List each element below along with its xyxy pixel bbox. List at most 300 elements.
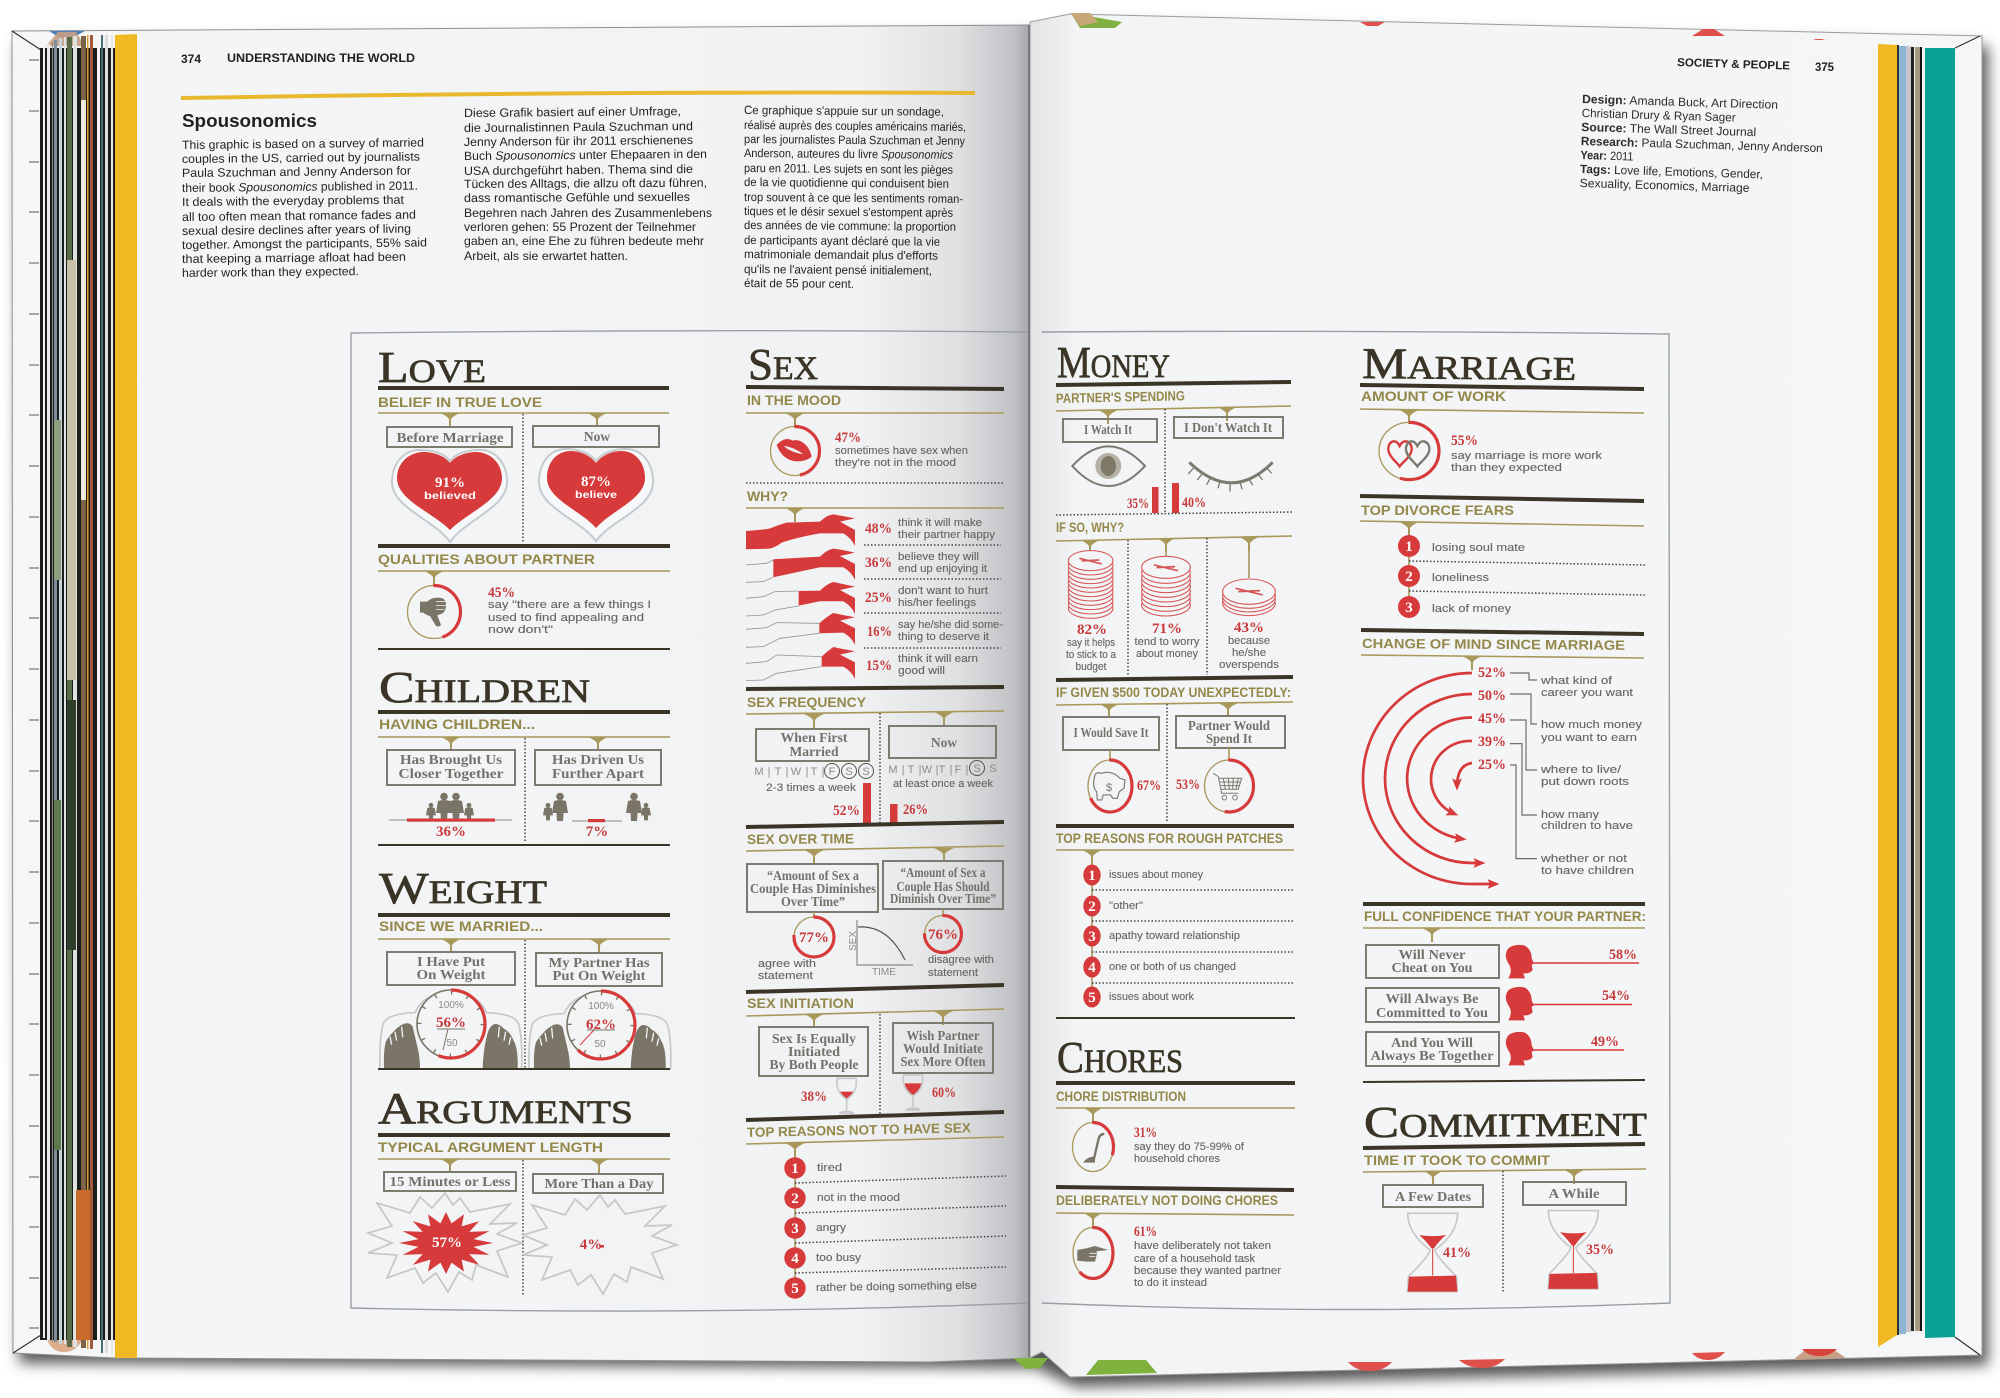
stat: 52%: 52% bbox=[833, 803, 860, 819]
subheading: sex frequency: SEX FREQUENCY bbox=[747, 695, 866, 710]
label: now: Now bbox=[931, 735, 957, 750]
German text: Jenny Anderson für ihr 2011 erschienenes bbox=[464, 133, 693, 149]
week row: first married: S bbox=[845, 766, 853, 778]
icon: piggy bank ring 67%: $ bbox=[1106, 782, 1112, 794]
English text: This graphic is based on a survey of married bbox=[182, 135, 424, 152]
icon: scale 56%: 100% bbox=[438, 1000, 464, 1011]
French text: Anderson, auteures du livre Spousonomics bbox=[744, 146, 953, 162]
icon: scale 56%: 56% bbox=[436, 1015, 466, 1031]
ranked list: rough patches: "other" bbox=[1109, 900, 1143, 912]
English text bbox=[182, 135, 427, 280]
label: will never cheat: Will Never bbox=[1398, 947, 1466, 962]
leader lines and labels: you want to earn bbox=[1541, 732, 1637, 744]
heart: 87% believe: 87% bbox=[581, 474, 611, 490]
stat: 55%: 55% bbox=[1451, 433, 1478, 449]
stat: 61%: care of a household task bbox=[1134, 1253, 1256, 1265]
icon: hourglass 41% bbox=[1408, 1213, 1471, 1292]
label: equally initiated: By Both People bbox=[770, 1057, 858, 1072]
French text: matrimoniale demandait plus d'efforts bbox=[744, 247, 938, 263]
stat list: why: believe they will bbox=[898, 551, 979, 563]
icon: scale 56% bbox=[380, 990, 522, 1068]
week row: now: S bbox=[989, 763, 997, 775]
label: equally initiated: Sex Is Equally bbox=[772, 1031, 856, 1046]
burst: 57% bbox=[368, 1193, 522, 1292]
credits: Year: 2011 bbox=[1580, 148, 1634, 164]
stat list: why: 48% bbox=[865, 521, 892, 537]
bars: 35% and 40%: 40% bbox=[1182, 495, 1206, 511]
left page bbox=[12, 25, 1030, 1362]
German text: Arbeit, als sie erwartet hatten. bbox=[464, 249, 628, 263]
English text: It deals with the everyday problems that bbox=[182, 193, 405, 209]
heart: 91% believed: believed bbox=[424, 490, 476, 502]
stat: 52%: 2-3 times a week bbox=[766, 782, 857, 794]
stat list: why: good will bbox=[898, 665, 945, 677]
coin stack: 43%: 43% bbox=[1234, 620, 1264, 636]
label: amount should diminish: Diminish Over Time” bbox=[890, 891, 996, 906]
ranked list: reasons not to have sex bbox=[784, 1150, 1006, 1299]
French text: tiques et le désir sexuel s'estompent après bbox=[744, 204, 953, 220]
stat: 55%: than they expected bbox=[1451, 462, 1562, 474]
right fore-edge stripes bbox=[1878, 36, 1980, 1355]
subheading: chore distribution: CHORE DISTRIBUTION bbox=[1056, 1089, 1186, 1104]
ring: 77%: statement bbox=[758, 970, 813, 982]
stat list: why: end up enjoying it bbox=[898, 563, 987, 575]
week row: first married: T bbox=[811, 766, 818, 778]
stat list: why: 25% bbox=[865, 590, 892, 606]
icon: family apart 7% bbox=[543, 793, 651, 840]
English text: their book Spousonomics published in 2011. bbox=[182, 179, 418, 195]
label: equally initiated bbox=[759, 1027, 868, 1076]
chart: long noses: 49% bbox=[1591, 1034, 1619, 1050]
stat list: why: his/her feelings bbox=[898, 597, 977, 609]
ranked list: divorce fears: 1 bbox=[1405, 539, 1413, 555]
ring: 77%: agree with bbox=[758, 958, 816, 970]
chart: sex over time curve: TIME bbox=[872, 967, 896, 978]
German text: gaben an, eine Ehe zu führen bedeute mehr bbox=[464, 234, 704, 248]
subheading: top reasons not to have sex: TOP REASONS NOT TO HAVE SEX bbox=[747, 1120, 971, 1140]
icon: hourglass 35% bbox=[1548, 1211, 1614, 1289]
week row: first married: T bbox=[775, 766, 782, 778]
credits: Sexuality, Economics, Marriage bbox=[1579, 176, 1750, 195]
week row: now bbox=[888, 760, 997, 776]
label: my partner has put on weight: Put On Weight bbox=[552, 968, 646, 983]
chart: sex over time curve bbox=[848, 920, 913, 978]
running head right: 375 bbox=[1815, 62, 1835, 74]
coin stack: 82%: 82% bbox=[1077, 622, 1107, 638]
label: partner would spend it bbox=[1176, 716, 1285, 748]
chart: concentric arrows: 52% bbox=[1478, 665, 1506, 681]
ranked list: reasons not to have sex: 4 bbox=[791, 1251, 799, 1267]
label: amount should diminish: “Amount of Sex a bbox=[900, 865, 986, 880]
heart: 87% believe: believe bbox=[575, 489, 617, 501]
English text: Paula Szuchman and Jenny Anderson for bbox=[182, 164, 411, 180]
German text: USA durchgeführt haben. Thema sind die bbox=[464, 162, 693, 178]
left fore-edge: page stack stripes bbox=[40, 35, 115, 1355]
stat list: why: don't want to hurt bbox=[898, 585, 988, 597]
wine glass: 60% bbox=[903, 1075, 956, 1110]
subheading: since we married: SINCE WE MARRIED... bbox=[379, 919, 543, 934]
heading: Love: LOVE bbox=[378, 343, 486, 392]
leader lines and labels: where to live/ bbox=[1540, 764, 1622, 776]
coin stack: 43%: because bbox=[1228, 635, 1270, 647]
stat: 31%: household chores bbox=[1134, 1153, 1220, 1165]
stat: 31%: 31% bbox=[1134, 1125, 1157, 1141]
stat: 45%: say "there are a few things I bbox=[488, 599, 651, 611]
label: now bbox=[533, 426, 659, 447]
subheading: qualities about partner: QUALITIES ABOUT PARTNER bbox=[378, 552, 595, 567]
label: a while bbox=[1523, 1182, 1626, 1205]
French text: qu'ils ne l'avaient pensé initialement, bbox=[744, 262, 932, 278]
label: amount diminishes: Over Time” bbox=[781, 894, 845, 909]
label: I don't watch it bbox=[1174, 417, 1283, 438]
running head right bbox=[1677, 57, 1835, 74]
heading: Money: MONEY bbox=[1057, 338, 1170, 387]
ranked list: rough patches bbox=[1083, 855, 1295, 1008]
bars: 35% and 40% bbox=[1127, 483, 1206, 513]
section: Commitment bbox=[1363, 1097, 1647, 1293]
subheading: sex over time: SEX OVER TIME bbox=[747, 831, 854, 847]
ranked list: reasons not to have sex: not in the mood bbox=[817, 1192, 900, 1204]
section: Marriage bbox=[1360, 339, 1646, 1082]
ranked list: divorce fears: 3 bbox=[1405, 600, 1413, 616]
ranked list: divorce fears: lack of money bbox=[1432, 603, 1512, 615]
wine glass: 60%: 60% bbox=[932, 1085, 956, 1101]
coin stack: 71%: 71% bbox=[1152, 621, 1182, 637]
label: I have put on weight: I Have Put bbox=[417, 954, 486, 969]
English text: couples in the US, carried out by journalists bbox=[182, 150, 420, 166]
label: always together: Always Be Together bbox=[1370, 1048, 1494, 1063]
German text: Tücken des Alltags, die allzu oft dazu führen, bbox=[464, 176, 707, 191]
label: wish partner would initiate: Wish Partner bbox=[906, 1028, 980, 1043]
leader lines and labels: career you want bbox=[1541, 687, 1633, 699]
label: more than a day: More Than a Day bbox=[544, 1176, 654, 1191]
leader lines and labels: how many bbox=[1541, 809, 1600, 821]
icon: scale 62%: 50 bbox=[594, 1039, 606, 1050]
stat: 55% bbox=[1451, 433, 1603, 474]
wine glass: 38% bbox=[801, 1078, 856, 1113]
chart: concentric arrows: 25% bbox=[1478, 757, 1506, 773]
label: further apart bbox=[535, 750, 661, 785]
running head right: SOCIETY & PEOPLE bbox=[1677, 57, 1791, 73]
English text: sexual desire declines after years of living bbox=[182, 222, 411, 238]
chart: long noses: 58% bbox=[1609, 947, 1637, 963]
label: I would save it bbox=[1063, 717, 1159, 750]
ranked list: rough patches: issues about work bbox=[1109, 991, 1194, 1003]
subheading: if given $500: IF GIVEN $500 TODAY UNEXPECTEDLY: bbox=[1056, 685, 1291, 700]
bars: 35% and 40%: 35% bbox=[1127, 496, 1149, 512]
English text: harder work than they expected. bbox=[182, 264, 359, 280]
coin stack: 82% bbox=[1066, 551, 1117, 673]
section: Sex bbox=[746, 340, 1006, 1299]
icon: scale 62% bbox=[529, 991, 671, 1069]
subheading: in the mood: IN THE MOOD bbox=[747, 393, 841, 408]
heading: Weight: WEIGHT bbox=[379, 864, 547, 913]
coin stack: 71% bbox=[1134, 556, 1200, 660]
ranked list: rough patches: 1 bbox=[1088, 868, 1096, 884]
chart: concentric arrows: 50% bbox=[1478, 688, 1506, 704]
label: will never cheat bbox=[1366, 945, 1499, 978]
chart: long noses bbox=[1506, 945, 1639, 1065]
label: my partner has put on weight bbox=[536, 953, 662, 986]
label: wish partner would initiate: Sex More Often bbox=[900, 1054, 986, 1069]
leader lines and labels: how much money bbox=[1541, 719, 1643, 731]
icon: lips ring 47% bbox=[770, 426, 820, 476]
label: closer together: Closer Together bbox=[398, 766, 504, 781]
label: partner would spend it: Partner Would bbox=[1188, 718, 1270, 733]
French text: Ce graphique s'appuie sur un sondage, bbox=[744, 103, 944, 119]
label: a few dates: A Few Dates bbox=[1395, 1189, 1471, 1204]
label: further apart: Further Apart bbox=[552, 766, 645, 781]
ranked list: rough patches: apathy toward relationship bbox=[1109, 930, 1240, 942]
label: always committed bbox=[1366, 988, 1499, 1022]
week row: first married bbox=[754, 764, 874, 778]
ranked list: reasons not to have sex: too busy bbox=[816, 1252, 862, 1264]
stat: 47%: sometimes have sex when bbox=[835, 445, 968, 457]
section: Arguments bbox=[368, 1084, 677, 1295]
ranked list: rough patches: issues about money bbox=[1109, 869, 1203, 881]
German text: verloren gehen: 55 Prozent der Teilnehmer bbox=[464, 220, 696, 234]
running head left bbox=[181, 53, 415, 66]
week row: now: W bbox=[922, 764, 933, 776]
label: will never cheat: Cheat on You bbox=[1392, 960, 1473, 975]
ranked list: rough patches: one or both of us changed bbox=[1109, 961, 1236, 973]
icon: shopping cart ring 53%: 53% bbox=[1176, 777, 1200, 793]
week row: first married: | bbox=[822, 766, 824, 778]
ranked list: reasons not to have sex: 5 bbox=[791, 1281, 799, 1297]
label: 15 minutes or less: 15 Minutes or Less bbox=[390, 1174, 510, 1189]
ranked list: rough patches: 4 bbox=[1088, 960, 1096, 976]
credits: Source: The Wall Street Journal bbox=[1581, 120, 1756, 139]
label: now bbox=[889, 726, 996, 758]
week row: now: | bbox=[902, 764, 904, 776]
heart: 91% believed bbox=[392, 450, 507, 542]
label: I have put on weight: On Weight bbox=[416, 967, 486, 982]
stat list: why: say he/she did some- bbox=[898, 619, 1003, 631]
chart: concentric arrows: 39% bbox=[1478, 734, 1506, 750]
left yellow page edge bbox=[115, 34, 137, 1358]
week row: now: | bbox=[950, 764, 952, 776]
label: my partner has put on weight: My Partner Has bbox=[548, 955, 650, 970]
label: amount diminishes: Couple Has Diminishes bbox=[750, 881, 876, 896]
French text: par les journalistes Paula Szuchman et Jenny bbox=[744, 132, 965, 148]
icon: piggy bank ring 67%: 67% bbox=[1137, 778, 1161, 794]
heart: 87% believe bbox=[539, 449, 653, 541]
coin stack: 71%: tend to worry bbox=[1134, 636, 1200, 648]
week row: now: F bbox=[955, 764, 962, 776]
French text: était de 55 pour cent. bbox=[744, 276, 854, 291]
label: I watch it: I Watch It bbox=[1084, 422, 1132, 437]
label: amount diminishes bbox=[747, 864, 878, 912]
subheading: full confidence: FULL CONFIDENCE THAT YOUR PARTNER: bbox=[1364, 909, 1646, 924]
leader lines and labels: children to have bbox=[1541, 820, 1633, 832]
coin stack: 71%: about money bbox=[1136, 648, 1198, 660]
ring: 76% bbox=[924, 909, 994, 979]
stat: 47%: 47% bbox=[835, 430, 861, 446]
subheading: deliberately not doing chores: DELIBERATELY NOT DOING CHORES bbox=[1056, 1193, 1278, 1208]
ranked list: reasons not to have sex: 3 bbox=[791, 1221, 799, 1237]
heading: Arguments: ARGUMENTS bbox=[378, 1084, 633, 1133]
stat: 26%: at least once a week bbox=[893, 778, 993, 790]
label: more than a day bbox=[533, 1174, 663, 1193]
subheading: if so why: IF SO, WHY? bbox=[1056, 520, 1124, 535]
German text: die Journalistinnen Paula Szuchman und bbox=[464, 119, 693, 135]
label: a while: A While bbox=[1548, 1186, 1600, 1201]
French text: réalisé auprès des couples américains mariés, bbox=[744, 118, 966, 134]
subheading: typical argument length: TYPICAL ARGUMENT LENGTH bbox=[378, 1140, 603, 1155]
ranked list: rough patches: 5 bbox=[1088, 990, 1096, 1006]
subheading: why: WHY? bbox=[747, 489, 788, 504]
English text: together. Amongst the participants, 55% said bbox=[182, 235, 427, 252]
icon: piggy bank ring 67% bbox=[1088, 750, 1161, 812]
icon: pointing hand ring 61% bbox=[1073, 1228, 1113, 1278]
stat: 26%: 26% bbox=[903, 802, 928, 818]
ring: 76%: disagree with bbox=[928, 954, 994, 966]
stat: 31%: say they do 75-99% of bbox=[1134, 1141, 1245, 1153]
label: always committed: Will Always Be bbox=[1386, 991, 1479, 1006]
subheading: top reasons for rough patches: TOP REASONS FOR ROUGH PATCHES bbox=[1056, 831, 1283, 846]
ranked list: reasons not to have sex: tired bbox=[817, 1162, 842, 1174]
week row: first married: F bbox=[829, 766, 836, 778]
ranked list: reasons not to have sex: 2 bbox=[791, 1191, 799, 1207]
subheading: amount of work: AMOUNT OF WORK bbox=[1361, 389, 1506, 404]
French text: trop souvent à ce que les sentiments roman- bbox=[744, 190, 963, 206]
stat list: why: their partner happy bbox=[898, 529, 996, 541]
icon: family together 36% bbox=[389, 793, 512, 840]
burst: 57%: 57% bbox=[432, 1235, 462, 1251]
running head left: UNDERSTANDING THE WORLD bbox=[227, 53, 415, 65]
stat: 45%: 45% bbox=[488, 585, 515, 601]
week row: first married: M bbox=[754, 766, 764, 778]
German text: dass romantische Gefühle und sexuelles bbox=[464, 190, 690, 205]
label: always together: And You Will bbox=[1391, 1035, 1473, 1050]
week row: first married: | bbox=[768, 766, 770, 778]
week row: now: S bbox=[973, 763, 981, 775]
coin stack: 43%: he/she bbox=[1232, 647, 1266, 659]
ranked list: reasons not to have sex: angry bbox=[816, 1222, 847, 1234]
stat list: why: thing to deserve it bbox=[898, 631, 989, 643]
German text: Buch Spousonomics unter Ehepaaren in den bbox=[464, 147, 707, 163]
burst: 4%: 4% bbox=[580, 1237, 602, 1253]
ranked list: rough patches: 3 bbox=[1088, 929, 1096, 945]
ranked list: rough patches: 2 bbox=[1088, 899, 1096, 915]
wine glass: 38%: 38% bbox=[801, 1089, 827, 1105]
label: when first married: When First bbox=[780, 730, 848, 745]
label: partner would spend it: Spend It bbox=[1206, 731, 1252, 746]
stat: 47% bbox=[835, 430, 968, 469]
icon: vacuum ring 31% bbox=[1072, 1122, 1114, 1172]
label: always committed: Committed to You bbox=[1376, 1005, 1489, 1020]
chart: high-heel leg bars bbox=[746, 514, 855, 681]
subheading: time it took to commit: TIME IT TOOK TO COMMIT bbox=[1364, 1153, 1551, 1168]
running head left: 374 bbox=[181, 54, 202, 66]
credits: Christian Drury & Ryan Sager bbox=[1581, 106, 1736, 125]
week row: now: | bbox=[966, 764, 968, 776]
heading: Marriage: MARRIAGE bbox=[1362, 339, 1576, 390]
ring: 76%: statement bbox=[928, 967, 978, 979]
credits: Tags: Love life, Emotions, Gender, bbox=[1580, 162, 1763, 181]
label: when first married: Married bbox=[790, 744, 839, 759]
label: a few dates bbox=[1383, 1185, 1483, 1207]
gutter line bbox=[1028, 25, 1030, 1357]
ranked list: reasons not to have sex: rather be doing something else bbox=[816, 1280, 977, 1294]
stat list: why: 36% bbox=[865, 555, 892, 571]
subheading: top divorce fears: TOP DIVORCE FEARS bbox=[1361, 503, 1514, 518]
German text: Begehren nach Jahren des Zusammenlebens bbox=[464, 206, 712, 220]
ring: 77%: 77% bbox=[799, 930, 829, 946]
stat: 61%: because they wanted partner bbox=[1134, 1265, 1281, 1277]
week row: first married: S bbox=[862, 766, 870, 778]
credits: Research: Paula Szuchman, Jenny Anderson bbox=[1581, 134, 1823, 155]
label: amount should diminish bbox=[883, 861, 1003, 909]
coin stack: 43%: overspends bbox=[1219, 659, 1280, 671]
icon: hourglass 35%: 35% bbox=[1586, 1242, 1614, 1258]
label: wish partner would initiate: Would Initiate bbox=[903, 1041, 983, 1056]
ranked list: divorce fears bbox=[1398, 528, 1646, 618]
section: Chores bbox=[1056, 1033, 1295, 1289]
icon: closed eye bbox=[1188, 462, 1273, 492]
article title: Spousonomics bbox=[182, 110, 317, 131]
credits bbox=[1579, 92, 1824, 197]
chart: long noses: 54% bbox=[1602, 988, 1630, 1004]
heading: Commitment: COMMITMENT bbox=[1364, 1097, 1647, 1147]
stat: 61%: 61% bbox=[1134, 1224, 1157, 1240]
week row: now: T bbox=[939, 764, 946, 776]
label: closer together: Has Brought Us bbox=[400, 752, 502, 767]
leader lines and labels: put down roots bbox=[1541, 776, 1630, 788]
ring: 76%: 76% bbox=[928, 927, 958, 943]
chart: concentric arrows: 45% bbox=[1478, 711, 1506, 727]
German text: Diese Grafik basiert auf einer Umfrage, bbox=[464, 104, 681, 120]
heading: Chores: CHORES bbox=[1057, 1033, 1183, 1082]
coin stack: 82%: say it helps bbox=[1067, 637, 1115, 649]
stat: 61%: have deliberately not taken bbox=[1134, 1240, 1271, 1252]
week row: first married: | bbox=[786, 766, 788, 778]
infographic frame bbox=[351, 331, 1670, 1311]
label: closer together bbox=[387, 750, 515, 785]
German text bbox=[464, 104, 712, 263]
chart: sex over time curve: SEX bbox=[848, 931, 859, 951]
credits: Design: Amanda Buck, Art Direction bbox=[1582, 92, 1778, 112]
French text: de participants ayant déclaré que la vie bbox=[744, 233, 940, 249]
French text: paru en 2011. Les sujets en sont les pièges bbox=[744, 161, 953, 177]
label: further apart: Has Driven Us bbox=[552, 752, 644, 767]
icon: open eye bbox=[1072, 446, 1145, 486]
label: always together bbox=[1366, 1032, 1499, 1066]
ring: 77% bbox=[758, 912, 834, 982]
stat list: why: 15% bbox=[866, 658, 892, 674]
heading: Sex: SEX bbox=[748, 340, 818, 389]
week row: now: | bbox=[919, 764, 921, 776]
label: before marriage bbox=[387, 427, 512, 447]
coin stack: 43% bbox=[1219, 579, 1280, 671]
section: Children bbox=[378, 663, 670, 845]
stat: 61% bbox=[1134, 1224, 1281, 1289]
leader lines and labels bbox=[1510, 673, 1643, 877]
ranked list: divorce fears: 2 bbox=[1405, 569, 1413, 585]
leader lines and labels: what kind of bbox=[1540, 675, 1613, 687]
icon: hourglass 41%: 41% bbox=[1443, 1245, 1471, 1261]
stat list: why: think it will earn bbox=[898, 653, 978, 665]
icon: scale 56%: 50 bbox=[446, 1038, 458, 1049]
label: equally initiated: Initiated bbox=[788, 1044, 841, 1059]
label: wish partner would initiate bbox=[893, 1023, 993, 1073]
ranked list: reasons not to have sex: 1 bbox=[791, 1161, 799, 1177]
subheading: having children: HAVING CHILDREN... bbox=[379, 717, 535, 732]
label: 15 minutes or less bbox=[384, 1172, 516, 1191]
heart: 91% believed: 91% bbox=[435, 475, 465, 491]
stat: 61%: to do it instead bbox=[1134, 1277, 1207, 1289]
week row: now: | bbox=[936, 764, 938, 776]
